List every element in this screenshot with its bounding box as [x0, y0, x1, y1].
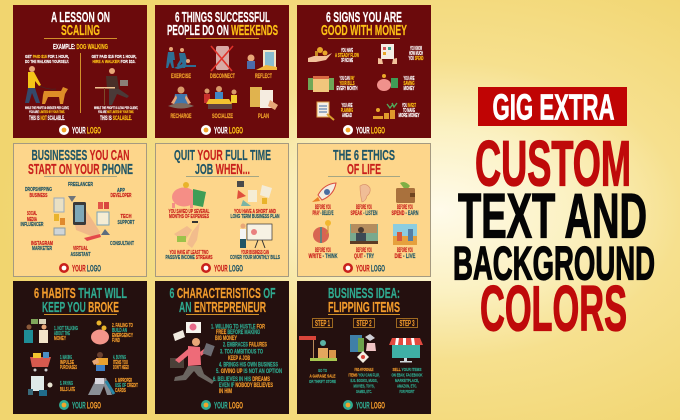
heading: a lesson on scaling: SCALING — [61, 22, 100, 39]
icon: checklist and magnifier — [317, 102, 334, 120]
logo: YOUR LOGO — [72, 126, 101, 136]
service labels: VIRTUAL — [73, 246, 88, 252]
entrepreneur list: 3. TOO AMBITIOUS TO — [220, 348, 263, 356]
heading: START ON YOUR PHONE — [28, 161, 133, 178]
logo: YOUR LOGO — [356, 400, 385, 410]
icon: presenter and board — [240, 224, 272, 248]
right note — [94, 106, 138, 122]
panel: businesses on your phone — [14, 144, 146, 276]
entrepreneur list: KEEP A JOB — [228, 355, 250, 362]
icon: piggy bank — [91, 320, 109, 344]
label: DISCONNECT — [210, 73, 235, 80]
heading — [333, 147, 395, 178]
icon: rocket — [312, 183, 336, 202]
heading: THE 6 ETHICS — [333, 147, 395, 164]
left note: YOU ARE LIMITED BY YOUR TIME. — [29, 110, 65, 114]
step 1 box: STEP 1 — [315, 319, 330, 328]
entrepreneur list: FREE BEFORE MAKING — [216, 329, 260, 336]
text: MONTHS OF EXPENSES — [169, 214, 209, 220]
text: YOUR BILLS — [340, 81, 355, 87]
panel: 6 things on weekends — [155, 5, 289, 138]
label: PLAN — [258, 113, 269, 120]
icon: ear — [360, 184, 370, 202]
step 1 text: A GARAGE SALE — [310, 374, 336, 380]
icon: online store — [389, 338, 423, 362]
icon: bills calendar — [308, 76, 334, 92]
text — [115, 378, 138, 394]
text: OF INCOME — [341, 58, 353, 64]
logo: YOUR LOGO — [356, 264, 385, 274]
labels: DIE - LIVE — [394, 253, 416, 260]
text — [404, 76, 415, 92]
heading: 6 THINGS SUCCESSFUL — [175, 9, 270, 26]
icon: reflect mirror — [247, 50, 277, 70]
text: EMERGENCY — [112, 333, 133, 339]
entrepreneur list: BIG MONEY — [215, 335, 238, 342]
heading — [28, 147, 133, 178]
icon: piggy and cash — [377, 74, 398, 91]
labels: WRITE - THINK — [308, 253, 338, 260]
panel: a lesson on scaling — [13, 5, 147, 138]
label: RECHARGE — [170, 113, 192, 120]
entrepreneur list: IN HIM — [219, 388, 232, 395]
icon: hand with coins — [308, 47, 332, 62]
heading: JOB WHEN... — [195, 161, 250, 178]
step 3 text: FOR PROFIT — [400, 389, 415, 395]
text: A STEADY FLOW — [335, 53, 359, 59]
text — [408, 46, 424, 62]
labels — [308, 204, 419, 260]
text: YOU SAVED UP SEVERAL — [168, 209, 210, 215]
text: COVER YOUR MONTHLY BILLS — [230, 255, 280, 261]
text — [60, 381, 75, 393]
entrepreneur list: 2. EMBRACES FAILURES — [223, 342, 267, 348]
icon: two people talking money — [24, 319, 48, 343]
service labels — [20, 182, 135, 258]
step 2 text: GAMES, ETC. — [356, 389, 372, 395]
example subheading: EXAMPLE: DOG WALKING — [53, 42, 108, 51]
service labels: INSTAGRAM — [31, 241, 53, 247]
step 3 text: SELL YOUR ITEMS — [392, 367, 422, 373]
right note: YOU ARE NOT LIMITED BY YOUR TIME. — [98, 110, 134, 114]
text — [341, 103, 353, 119]
left column text: GET PAID $15 FOR 1 HOUR, — [25, 54, 69, 59]
text: IMPULSE — [60, 360, 74, 366]
icon: brain with bulb — [313, 220, 331, 243]
text: PASSIVE INCOME STREAMS — [166, 255, 213, 261]
logo: YOUR LOGO — [72, 400, 101, 410]
text: BUILD AN — [112, 328, 127, 334]
step 3 text — [392, 367, 423, 395]
step 1 text — [309, 368, 336, 385]
labels: BEFORE YOU — [397, 247, 413, 254]
text: HOW MUCH — [409, 51, 423, 57]
heading: QUIT YOUR FULL TIME — [174, 147, 271, 164]
panel: 6 characteristics of an entrepreneur — [155, 281, 289, 414]
label: REFLECT — [255, 73, 272, 80]
text: AHEAD — [342, 113, 352, 119]
icon: planner notebook — [250, 87, 278, 110]
icon: books and items — [350, 334, 376, 363]
entrepreneur list: 6. BELIEVES IN HIS DREAMS — [213, 376, 270, 383]
text: YOU HAVE — [341, 48, 353, 54]
entrepreneur list: 5. GIVING UP IS NOT AN OPTION — [216, 368, 282, 375]
service labels: BUSINESS — [30, 193, 48, 199]
text — [60, 355, 77, 371]
panel: 6 habits keep you broke — [13, 281, 147, 414]
text: TO MAKE — [403, 108, 415, 114]
icon: credit card hand — [88, 378, 114, 395]
icon: person walking dog — [25, 66, 68, 104]
step 2 text: E.G. BOOKS, MUGS, — [350, 378, 378, 384]
text: MONEY — [404, 86, 415, 92]
icon: bills and bulb — [28, 376, 52, 396]
gig extra badge — [478, 86, 627, 128]
step 2 text: FIND AFFORDABLE — [354, 367, 374, 373]
service labels: DROPSHIPPING — [25, 187, 52, 193]
labels: BEFORE YOU — [315, 204, 331, 211]
entrepreneur list: 1. WILLING TO HUSTLE FOR — [211, 324, 265, 330]
text — [398, 103, 420, 119]
service labels: SOCIAL — [27, 211, 37, 217]
text: 1. NOT TALKING — [54, 326, 78, 332]
icon: shopping cart — [30, 352, 51, 372]
text — [230, 209, 280, 220]
text: BILLS LATE — [60, 387, 75, 393]
service labels: INFLUENCER — [20, 222, 44, 228]
labels: BEFORE YOU — [315, 247, 331, 254]
text: YOU HAVE AT LEAST TWO — [170, 250, 208, 256]
text — [166, 250, 213, 261]
service labels: MEDIA — [27, 217, 37, 223]
icon: business plan charts — [237, 181, 272, 206]
text — [54, 326, 78, 342]
icon: man at desk — [350, 224, 378, 244]
icon: piggy bank with cash — [172, 182, 206, 208]
heading: BUSINESS IDEA: — [328, 285, 400, 302]
labels: SPEAK - LISTEN — [350, 210, 378, 217]
panel: 6 signs good with money: YOU KNOW — [410, 46, 422, 52]
heading: BUSINESSES YOU CAN — [32, 147, 130, 164]
icon: budget sheet — [378, 44, 397, 64]
text: YOUR BUSINESS CAN — [241, 250, 269, 256]
text: CARDS — [115, 388, 126, 394]
text — [335, 48, 359, 64]
labels: SPEND - EARN — [392, 210, 419, 217]
step 3 box: STEP 3 — [400, 319, 415, 328]
service labels: DEVELOPER — [110, 193, 132, 199]
icon: hands exchanging money — [174, 221, 200, 248]
panel: quit your full time job — [156, 144, 288, 276]
text: MORE MONEY — [398, 113, 420, 119]
text: 2. FAILING TO — [112, 323, 133, 329]
icon: wallet — [396, 182, 415, 203]
service labels: MARKETER — [32, 246, 52, 252]
right note: WHILE THE PROFIT IS LESS PER CLIENT, — [94, 106, 138, 110]
right column text: HIRE A WALKER FOR $10. — [92, 59, 136, 64]
text: 5. PAYING — [60, 381, 73, 387]
text: YOU INVEST — [402, 103, 416, 109]
left column text: DO THE WALKING YOURSELF. — [25, 59, 69, 64]
text — [336, 76, 358, 92]
service labels: CONSULTANT — [110, 241, 134, 247]
step 2 text — [348, 367, 380, 395]
text: ITEMS YOU — [113, 360, 128, 366]
text: MONEY — [54, 336, 66, 342]
text: YOU SPEND — [408, 56, 424, 62]
text: 6. IMPROPER — [115, 378, 132, 384]
icon: running businessman — [170, 322, 215, 384]
logo: YOUR LOGO — [72, 264, 101, 274]
text — [112, 323, 133, 344]
heading: 6 CHARACTERISTICS OF — [170, 285, 276, 302]
heading: 6 SIGNS YOU ARE — [326, 9, 402, 26]
icon: meditating person — [168, 86, 194, 108]
panel: 6 signs good with money: PLANNING — [341, 108, 353, 114]
right column text: GET PAID $15 FOR 1 HOUR, — [92, 54, 136, 59]
heading — [34, 285, 127, 316]
icon: woman with bills — [92, 352, 108, 371]
step 2 text: MOVIES, TOYS, — [354, 384, 375, 390]
text: FUND — [112, 338, 120, 344]
panel: 6 ethics of life — [298, 144, 430, 276]
icon: investment growth — [373, 103, 397, 119]
text: YOU HAVE A SHORT AND — [234, 209, 276, 215]
labels: QUIT - TRY — [354, 253, 374, 260]
text: SAVING — [404, 81, 415, 87]
left column text — [25, 54, 69, 64]
text: YOU ARE — [342, 103, 353, 109]
entrepreneur list: 4. BRINGS HIS OWN BUSINESS — [219, 362, 278, 368]
icon: hand with phone and apps — [54, 196, 110, 241]
text: 3. MAKING — [60, 355, 72, 361]
icon: crossed out phone — [211, 46, 233, 71]
heading: FLIPPING ITEMS — [328, 299, 400, 316]
icon: exercise — [166, 47, 196, 69]
entrepreneur list — [211, 324, 282, 395]
service labels: TECH — [120, 214, 132, 220]
icon: friends socializing — [204, 86, 237, 109]
left note — [25, 106, 69, 122]
text: 4. BUYING — [113, 355, 126, 361]
icon: city and sky — [393, 224, 417, 245]
left note: THIS IS NOT SCALABLE. — [29, 115, 65, 122]
step 1 text: GO TO — [318, 368, 327, 374]
labels: PRAY - BELIEVE — [312, 210, 334, 217]
labels: BEFORE YOU — [356, 247, 372, 254]
text: DON'T NEED — [113, 365, 129, 371]
step 2 box: STEP 2 — [356, 319, 372, 328]
text — [230, 250, 280, 261]
panel: 6 signs good with money — [297, 5, 431, 138]
label: EXERCISE — [171, 73, 191, 80]
heading — [174, 147, 271, 178]
text: EVERY MONTH — [336, 86, 358, 92]
icon: walker at cafe table — [95, 68, 129, 105]
heading: OF LIFE — [347, 161, 381, 178]
right column text — [92, 54, 136, 64]
heading — [170, 285, 276, 316]
text — [168, 209, 210, 220]
step 3 text: MARKETPLACE, — [395, 378, 419, 384]
logo: YOUR LOGO — [214, 400, 243, 410]
service labels: FREELANCER — [68, 182, 93, 188]
logo: YOUR LOGO — [214, 126, 243, 136]
heading — [328, 285, 400, 316]
icon: garage sale boxes — [299, 336, 337, 361]
step 3 text: AMAZON, ETC. — [397, 384, 417, 390]
panel: business idea flipping items — [297, 281, 431, 414]
step 3 text: ON EBAY, FACEBOOK — [392, 372, 423, 378]
text: PURCHASES — [60, 365, 77, 371]
labels: BEFORE YOU — [356, 204, 372, 211]
logo: YOUR LOGO — [214, 264, 243, 274]
left note: WHILE THE PROFIT IS GREATER PER CLIENT, — [25, 106, 69, 110]
text: YOU CAN PAY — [340, 76, 355, 82]
heading: a lesson on scaling: A LESSON ON — [51, 9, 110, 26]
right note: THIS IS SCALABLE. — [100, 115, 132, 122]
label: SOCIALIZE — [212, 113, 233, 120]
service labels: ASSISTANT — [70, 252, 91, 258]
heading: PEOPLE DO ON WEEKENDS — [167, 22, 278, 39]
text: YOU ARE — [404, 76, 415, 82]
heading: GOOD WITH MONEY — [321, 22, 407, 39]
step 2 text: ITEMS YOU CAN FLIP, — [348, 372, 380, 378]
heading: 6 HABITS THAT WILL — [34, 285, 127, 302]
entrepreneur list: EVEN IF NOBODY BELIEVES — [219, 382, 273, 389]
service labels: SUPPORT — [118, 220, 135, 226]
heading: KEEP YOU BROKE — [42, 299, 119, 316]
heading — [321, 9, 407, 39]
text — [113, 355, 129, 371]
heading — [167, 9, 278, 39]
text: USE OF CREDIT — [115, 383, 138, 389]
step 1 text: OR THRIFT STORE — [309, 379, 336, 385]
service labels: APP — [117, 188, 125, 194]
text: LONG TERM BUSINESS PLAN — [230, 214, 280, 220]
heading: AN ENTREPRENEUR — [179, 299, 266, 316]
text: ABOUT THE — [54, 331, 70, 337]
logo: YOUR LOGO — [356, 126, 385, 136]
labels: BEFORE YOU — [397, 204, 413, 211]
heading: a lesson on scaling — [51, 9, 110, 39]
